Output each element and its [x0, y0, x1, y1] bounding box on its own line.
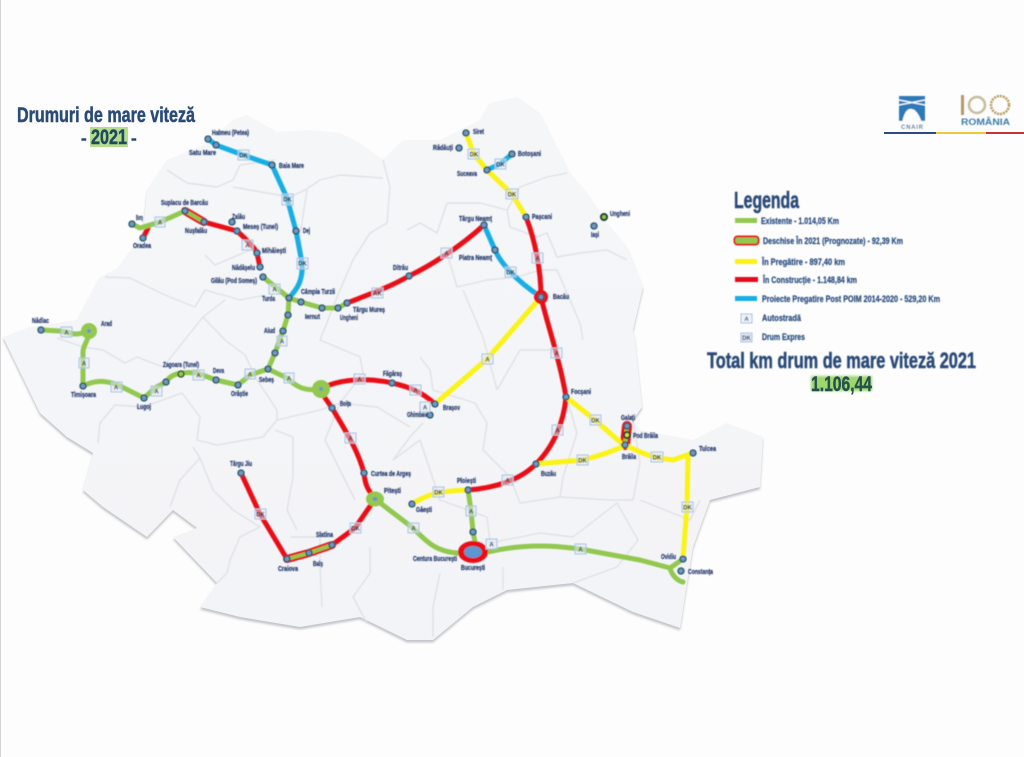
city labels: Brăila — [622, 454, 636, 461]
city labels: Siret — [473, 129, 484, 136]
city labels: Mihăiești — [262, 248, 286, 255]
legend: motorway: A — [744, 317, 749, 323]
city labels: Brașov — [443, 405, 460, 412]
city labels: Târgu Mureș — [353, 307, 385, 314]
title: - — [81, 129, 87, 148]
road type badges: DK — [653, 456, 662, 462]
city labels: Galați — [621, 415, 635, 422]
city labels: Pod Brăila — [633, 433, 658, 440]
city labels: Nușfalău — [185, 228, 207, 235]
road type badges: DK — [351, 526, 360, 532]
city labels: Iernut — [305, 314, 321, 321]
legend: express road: Drum Expres — [762, 332, 805, 342]
road type badges: A — [578, 548, 583, 554]
road type badges: DK — [683, 506, 692, 512]
road type badges: A — [114, 386, 119, 392]
city labels: Zalău — [232, 214, 245, 221]
city labels: Botoșani — [518, 151, 541, 158]
city labels: Slatina — [316, 532, 333, 539]
city labels: Câmpia Turzii — [301, 289, 335, 296]
legend: express road — [741, 332, 805, 342]
legend: in preparation: În Pregătire - 897,40 km — [761, 256, 845, 267]
logo: România 100 — [961, 95, 1011, 127]
city labels: Craiova — [278, 566, 298, 573]
road network — [32, 129, 716, 582]
city labels: Oradea — [133, 243, 151, 250]
legend: opened 2021 — [734, 235, 903, 246]
city labels: Turda — [262, 296, 275, 303]
legend heading: Legenda — [734, 187, 799, 213]
road type badges: DK — [470, 152, 479, 158]
city labels: Pitești — [384, 488, 401, 495]
city labels: Aiud — [264, 328, 275, 335]
București ring — [458, 541, 488, 563]
road type badges: A — [245, 244, 250, 250]
city labels: Meseș (Tunel) — [243, 224, 278, 231]
legend: post POIM projects: Proiecte Pregatire Post POIM 2014-2020 - 529,20 Km — [762, 294, 940, 304]
city labels: Baia Mare — [279, 163, 304, 170]
city labels: Balș — [313, 561, 323, 568]
road type badges: A — [348, 436, 353, 442]
road type badges: A — [272, 288, 277, 294]
road type badges: A — [554, 352, 559, 358]
city labels: Constanța — [688, 569, 713, 576]
city labels: Focșani — [571, 389, 591, 396]
legend: existing: Existente - 1.014,05 Km — [761, 216, 839, 226]
city labels: Centura București — [413, 556, 457, 563]
road type badges: DK — [506, 270, 515, 276]
city labels: Sebeș — [259, 377, 274, 384]
city labels: Nădășelu — [232, 265, 255, 272]
logo: România 100: ROMÂNIA — [961, 116, 1011, 127]
city labels: Târgu Jiu — [230, 461, 252, 468]
road type badges: DK — [578, 458, 587, 464]
city labels: Ditrău — [393, 265, 408, 272]
road type badges: A — [248, 372, 253, 378]
city labels: Ghimbav — [407, 412, 427, 419]
logo: CNAIR — [899, 96, 925, 131]
Pitești interchange — [366, 492, 384, 506]
city labels: Timișoara — [71, 392, 96, 399]
road type badges: A — [357, 378, 362, 384]
road type badges: DK — [508, 192, 517, 198]
road type badges: DK — [256, 512, 265, 518]
map of Romania with county borders — [3, 97, 763, 642]
total km value: 1.106,44 — [811, 373, 872, 396]
legend: motorway: Autostradă — [762, 313, 802, 323]
legend — [734, 187, 940, 342]
legend: opened 2021: Deschise În 2021 (Prognozate) - 92,39 Km — [763, 235, 903, 246]
city labels: Deva — [213, 368, 224, 375]
city labels: Gilău (Pod Someș) — [211, 278, 257, 285]
city labels: Boița — [340, 401, 351, 408]
road type badges: A — [154, 390, 159, 396]
city labels: Târgu Neamț — [459, 216, 493, 223]
city labels: Rădăuți — [433, 145, 453, 152]
legend: express road: DK — [742, 336, 751, 342]
city labels: Arad — [101, 321, 112, 328]
road type badges: DK — [298, 262, 307, 268]
city labels: Buzău — [541, 471, 556, 478]
Sibiu interchange — [312, 380, 330, 398]
road type badges: A — [287, 376, 292, 382]
city labels: Iași — [591, 232, 599, 239]
road type badges: AK — [373, 292, 382, 298]
city labels: Nădlac — [32, 318, 49, 325]
city labels: Zagoara (Tunel) — [163, 362, 199, 369]
city labels: Pașcani — [532, 214, 552, 221]
legend: under construction: În Construcție - 1.148,84 km — [762, 274, 857, 285]
road type badges: A — [411, 526, 416, 532]
city labels: București — [461, 565, 485, 572]
city labels: Făgăraș — [383, 371, 402, 378]
roads: opened 2021 red outline — [185, 211, 627, 559]
city labels: Ovidiu — [661, 554, 676, 561]
road type badges: A — [555, 428, 560, 434]
road type badges: A — [444, 252, 449, 258]
logo: CNAIR: CNAIR — [901, 125, 924, 131]
road type badges: A — [280, 340, 285, 346]
roads: in preparation (yellow) — [412, 133, 693, 558]
road type badges: A — [485, 358, 490, 364]
road type badges: DK — [434, 490, 443, 496]
city labels: Piatra Neamț — [459, 255, 493, 262]
tricolor rule — [884, 132, 1024, 134]
road type badges: A — [535, 256, 540, 262]
title: Drumuri de mare viteză — [17, 104, 195, 127]
title: 2021 — [91, 126, 127, 149]
city labels: Bacău — [553, 294, 569, 301]
Arad interchange — [81, 323, 97, 339]
road type badges: A — [469, 510, 474, 516]
road type badges: A — [505, 478, 510, 484]
city labels: Suceava — [457, 171, 477, 178]
city labels: Curtea de Argeș — [371, 471, 411, 478]
city labels: Găești — [416, 507, 432, 514]
city labels: Ungheni — [610, 211, 630, 218]
road type badges: A — [489, 542, 494, 548]
road type badges: A — [158, 220, 163, 226]
road type badges — [61, 149, 693, 554]
city labels: Dej — [303, 228, 310, 235]
city labels: Orăștie — [231, 391, 248, 398]
road type badges: A — [413, 388, 418, 394]
roads: under construction (red) — [143, 211, 566, 559]
legend: in preparation — [735, 256, 845, 267]
city labels: Satu Mare — [189, 150, 216, 157]
roads: prepared projects (blue) — [208, 139, 541, 298]
city nodes — [38, 130, 696, 574]
city labels: Suplacu de Barcău — [161, 200, 208, 207]
title: - — [131, 129, 137, 148]
road type badges: A — [196, 374, 201, 380]
city labels — [32, 129, 716, 576]
road type badges: A — [423, 406, 428, 412]
city labels: Borș — [136, 215, 143, 222]
title — [17, 104, 195, 149]
road type badges: A — [64, 330, 69, 336]
road type badges: A — [82, 362, 87, 368]
legend: motorway — [741, 313, 802, 323]
city labels: Tulcea — [699, 446, 716, 453]
city labels: Ungheni — [340, 315, 358, 322]
road type badges: DK — [496, 162, 505, 168]
road type badges: DK — [239, 154, 248, 160]
legend: existing — [735, 216, 839, 226]
roads: existing (green) — [41, 211, 683, 582]
road type badges: DK — [283, 198, 292, 204]
city labels: Lugoj — [137, 404, 151, 411]
city labels: Ploiești — [457, 478, 476, 485]
city labels: Halmeu (Petea) — [212, 130, 249, 137]
road type badges: DK — [591, 418, 600, 424]
Bacău junction ring — [534, 290, 548, 304]
legend: under construction — [735, 274, 857, 285]
